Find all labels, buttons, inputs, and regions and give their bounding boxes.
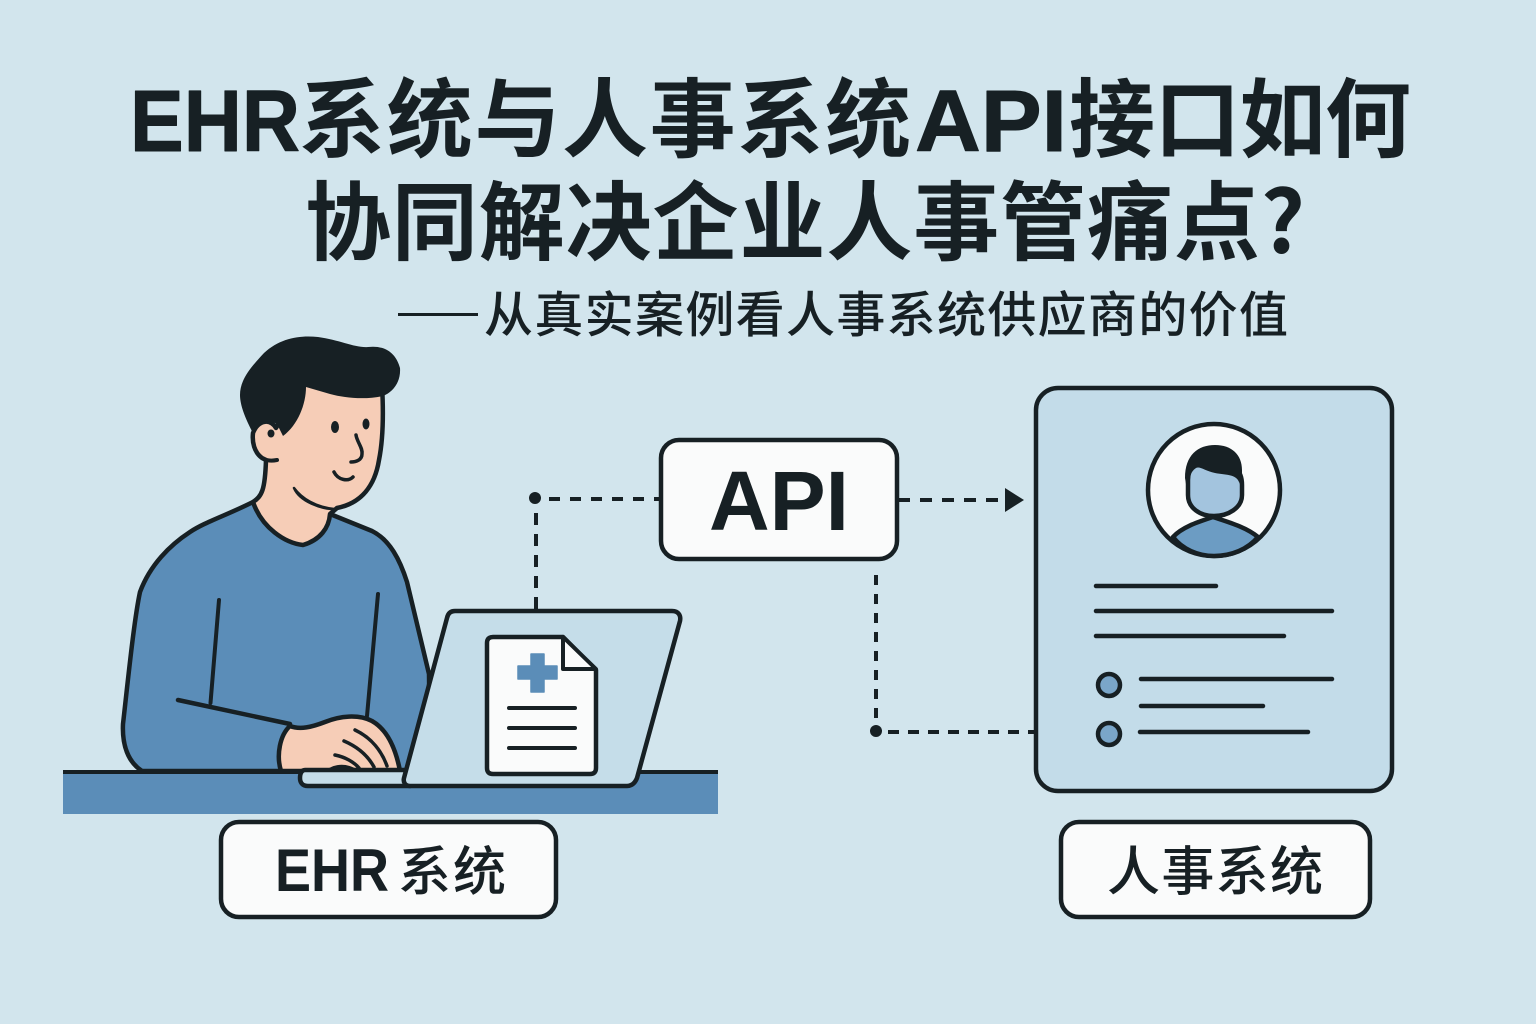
label: EHR system: EHR (275, 837, 389, 904)
keyboard base (300, 770, 410, 786)
API box: API (709, 454, 849, 548)
title (130, 50, 1411, 278)
title: 系统与人事系统 (299, 50, 911, 175)
laptop (300, 611, 680, 786)
title: 接口如何 (1069, 50, 1411, 175)
label: HR system: 人事系统 (1107, 830, 1323, 906)
hand (279, 717, 400, 771)
connector: EHR laptop to API (529, 492, 661, 611)
title: API (915, 73, 1067, 170)
nose (351, 435, 362, 462)
hair (240, 336, 400, 436)
neck and face (253, 380, 383, 545)
title: EHR (130, 73, 300, 170)
jaw shadow line (294, 488, 334, 509)
label: HR system (1061, 822, 1370, 917)
illustration: person at laptop (123, 336, 430, 771)
mouth (334, 472, 353, 480)
connector: API to HR system arrow (898, 488, 1024, 512)
document icon (487, 637, 596, 774)
screen (404, 611, 680, 786)
label: EHR system: 系统 (398, 830, 506, 906)
connector: API down to HR system (870, 575, 1036, 737)
panel: HR system profile card (1036, 388, 1392, 791)
subtitle: 从真实案例看人事系统供应商的价值 (484, 276, 1288, 347)
text lines (1096, 586, 1332, 636)
bullet lines (1140, 679, 1332, 732)
ear detail (268, 430, 274, 438)
sweater (123, 502, 430, 771)
desk (63, 770, 718, 814)
label: EHR system (221, 822, 556, 917)
bullet 2 (1098, 723, 1120, 745)
avatar (1148, 424, 1280, 556)
sleeve lines (210, 594, 378, 716)
title: 协同解决企业人事管痛点? (305, 153, 1305, 278)
API box (661, 440, 897, 559)
medical cross (518, 654, 557, 692)
eyes (331, 421, 339, 433)
bullet 1 (1098, 674, 1120, 696)
